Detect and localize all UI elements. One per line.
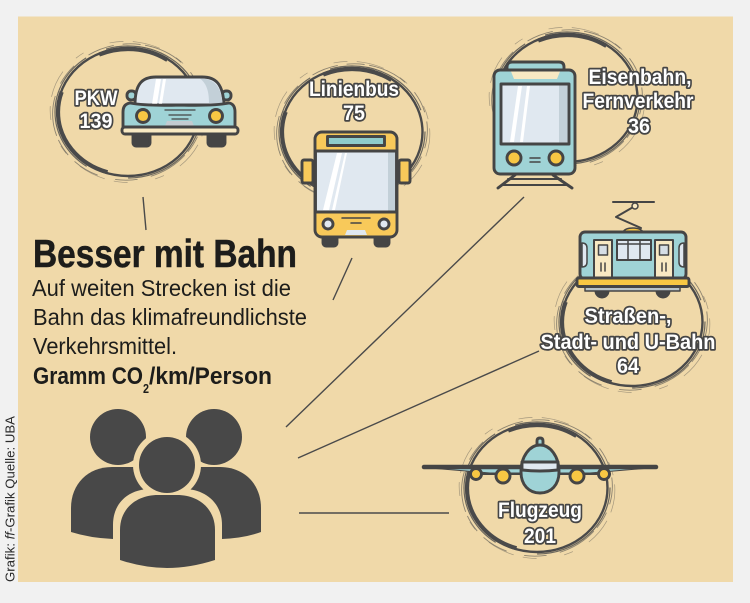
- label: Flugzeug 201: [498, 499, 582, 548]
- label: Eisenbahn, Fernverkehr 36: [582, 66, 694, 138]
- intro text: [32, 275, 307, 359]
- vehicle: tram with label: [540, 202, 719, 403]
- heading and intro text: [32, 233, 307, 396]
- label: Eisenbahn, Fernverkehr 36: 36: [628, 115, 650, 138]
- source credit: Grafik: ff-Grafik Quelle: UBA: [2, 416, 18, 582]
- vehicle: bus with label: [265, 51, 439, 246]
- unit line: Gramm CO: [33, 363, 143, 390]
- label: Linienbus 75: [309, 78, 399, 125]
- label: Flugzeug 201: Flugzeug: [498, 499, 582, 522]
- label: Straßen-, Stadt- und U-Bahn 64: Stadt- und U-Bahn: [540, 331, 716, 354]
- label: PKW 139: 139: [80, 110, 112, 133]
- vehicle: long-distance train with label: [480, 17, 694, 188]
- icon: train: [494, 62, 575, 188]
- icon: plane: [424, 438, 656, 493]
- label: Straßen-, Stadt- und U-Bahn 64: [540, 305, 716, 378]
- label: Straßen-, Stadt- und U-Bahn 64: 64: [617, 355, 639, 378]
- intro text: Auf weiten Strecken ist die: [32, 275, 291, 301]
- label: Linienbus 75: 75: [343, 102, 365, 125]
- unit line: 2: [143, 381, 149, 396]
- label: Eisenbahn, Fernverkehr 36: Fernverkehr: [582, 90, 694, 113]
- intro text: Verkehrsmittel.: [33, 333, 177, 359]
- unit line: [33, 363, 272, 396]
- icon: car: [122, 77, 238, 146]
- icon: tram: [577, 202, 689, 297]
- icon: bus: [302, 132, 410, 246]
- connector lines: [143, 197, 539, 513]
- vehicle: plane with label: [424, 407, 656, 569]
- label: Straßen-, Stadt- und U-Bahn 64: Straßen-,: [584, 305, 672, 328]
- title: Besser mit Bahn: [33, 233, 297, 276]
- label: PKW 139: PKW: [74, 87, 118, 110]
- label: Linienbus 75: Linienbus: [309, 78, 399, 101]
- intro text: Bahn das klimafreundlichste: [33, 304, 307, 330]
- label: PKW 139: [74, 87, 118, 133]
- label: Eisenbahn, Fernverkehr 36: Eisenbahn,: [588, 66, 692, 89]
- icon: people group: [71, 409, 261, 568]
- unit line: /km/Person: [149, 363, 272, 390]
- vehicle: car with label: [41, 31, 238, 193]
- label: Flugzeug 201: 201: [524, 525, 556, 548]
